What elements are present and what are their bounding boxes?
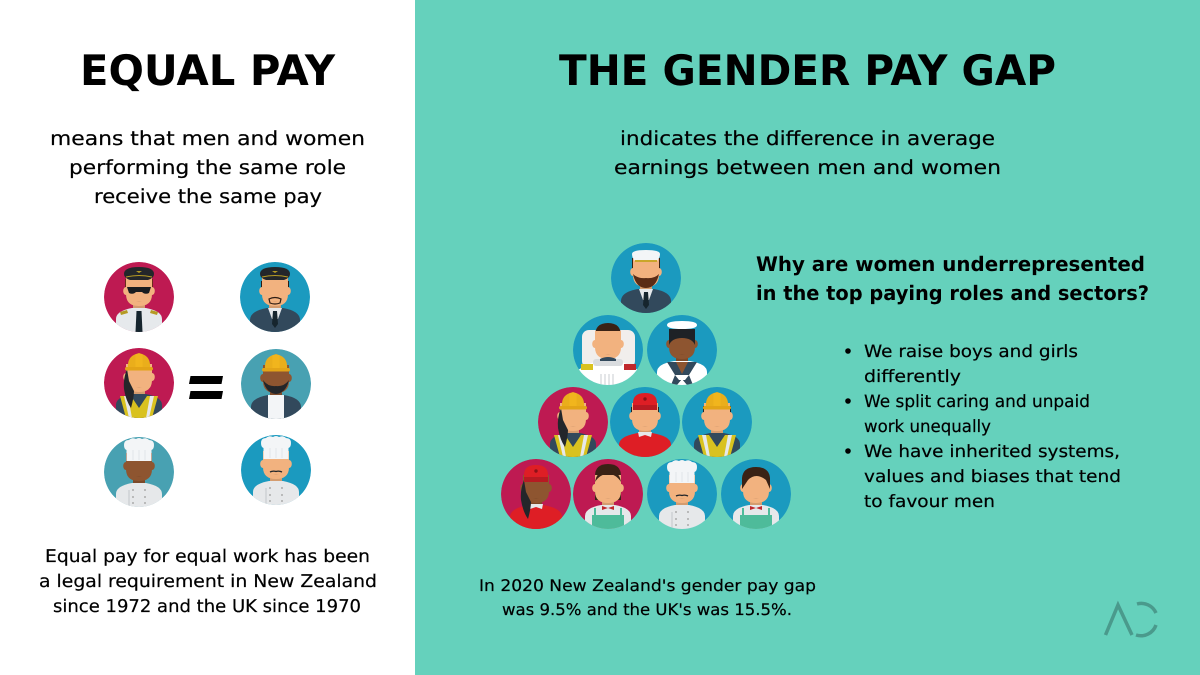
bullet list of reasons: work unequally (864, 417, 991, 437)
icon: female construction worker (538, 387, 608, 457)
text: pay gap statistics: was 9.5% and the UK's was 15.5%. (502, 600, 792, 619)
pyramid of workers (501, 243, 791, 529)
icon: female pilot (104, 262, 174, 332)
text: legal requirement note: a legal requirement in New Zealand (39, 572, 377, 592)
bullet list of reasons: to favour men (864, 492, 995, 512)
bullet list of reasons: differently (864, 367, 961, 387)
icon: sailor (647, 315, 717, 385)
bullet list of reasons (845, 342, 1121, 512)
text: legal requirement note: since 1972 and the UK since 1970 (53, 597, 361, 617)
left white panel (0, 0, 415, 675)
text: equal pay definition (50, 127, 365, 208)
text: legal requirement note: Equal pay for equal work has been (45, 547, 370, 567)
text: pay gap statistics (479, 576, 816, 619)
text: gender pay gap definition: indicates the difference in average (620, 127, 995, 150)
icon: male waiter (721, 459, 791, 529)
bullet list of reasons: We have inherited systems, (864, 442, 1120, 462)
right teal panel (415, 0, 1200, 675)
icon: female waitress (573, 459, 643, 529)
question heading: in the top paying roles and sectors? (756, 281, 1149, 305)
icon: male construction worker (241, 349, 311, 419)
icon: male pilot (240, 262, 310, 332)
icon: female construction worker (104, 348, 174, 418)
text: equal pay definition: means that men and women (50, 127, 365, 150)
icon: male chef (647, 459, 717, 529)
icon: male worker in red cap (610, 387, 680, 457)
heading: equal pay: EQUAL PAY (80, 46, 336, 95)
icon: female worker in red cap (501, 459, 571, 529)
bullet list of reasons: We raise boys and girls (864, 342, 1078, 362)
text: gender pay gap definition: earnings between men and women (614, 156, 1001, 179)
bullet list of reasons: values and biases that tend (864, 467, 1121, 487)
text: legal requirement note (39, 547, 377, 617)
icon: female chef (104, 437, 174, 507)
heading: the gender pay gap: THE GENDER PAY GAP (559, 46, 1056, 95)
icon: male chef (241, 435, 311, 505)
icon: equals sign (189, 376, 223, 399)
logo: AC monogram (1106, 603, 1156, 636)
question heading: Why are women underrepresented (756, 252, 1145, 276)
bullet list of reasons: We split caring and unpaid (864, 392, 1090, 412)
icon: ship captain (611, 243, 681, 313)
text: gender pay gap definition (614, 127, 1001, 179)
icon: male construction worker (682, 387, 752, 457)
text: pay gap statistics: In 2020 New Zealand's gender pay gap (479, 576, 816, 595)
icon: astronaut (573, 315, 643, 385)
question heading (756, 252, 1149, 305)
text: equal pay definition: performing the same role (69, 156, 346, 179)
text: equal pay definition: receive the same pay (94, 185, 322, 208)
